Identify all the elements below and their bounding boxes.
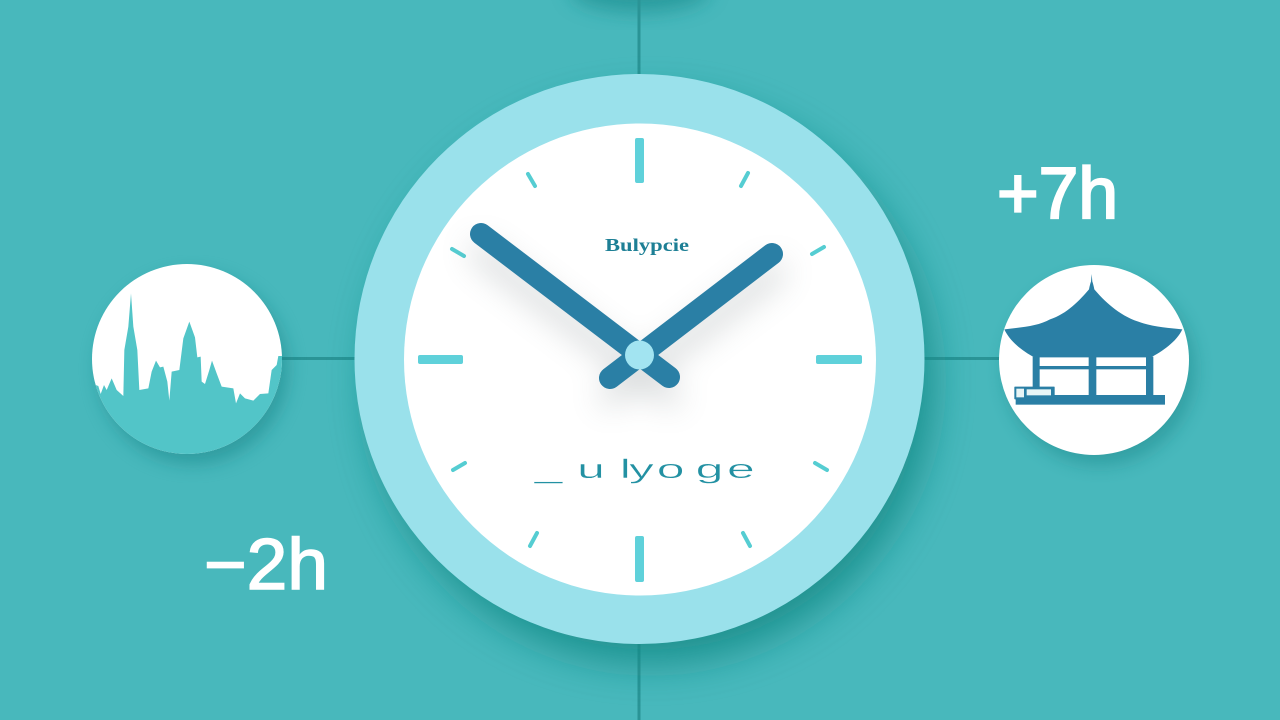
clock shadow — [369, 99, 933, 663]
left city badge — [87, 264, 293, 464]
clock bezel — [354, 74, 924, 644]
minor ticks — [452, 173, 827, 546]
label: plus seven hours: +7h — [997, 154, 1118, 234]
icon: temple — [1004, 274, 1182, 405]
hour ticks — [418, 138, 862, 582]
base — [1016, 395, 1165, 405]
top shadow blob — [570, 0, 710, 12]
top label: Bulypcie — [605, 235, 689, 255]
label: minus two hours: −2h — [204, 525, 328, 605]
badge shadow — [98, 274, 288, 464]
hands shadow — [480, 252, 775, 396]
right temple badge — [999, 265, 1195, 465]
small vehicle — [1014, 387, 1055, 399]
posts — [1033, 357, 1040, 396]
hub — [625, 340, 654, 370]
clock — [354, 74, 933, 663]
clock hands — [481, 234, 772, 378]
connector lines — [280, 0, 1002, 720]
clock face — [404, 124, 876, 596]
roof — [1004, 274, 1182, 357]
badge disc — [999, 265, 1189, 455]
beam — [1038, 366, 1147, 369]
icon: city skyline — [96, 294, 282, 454]
badge shadow — [1005, 275, 1195, 465]
badge disc — [92, 264, 282, 454]
bottom label: _ulyoge — [533, 454, 755, 484]
